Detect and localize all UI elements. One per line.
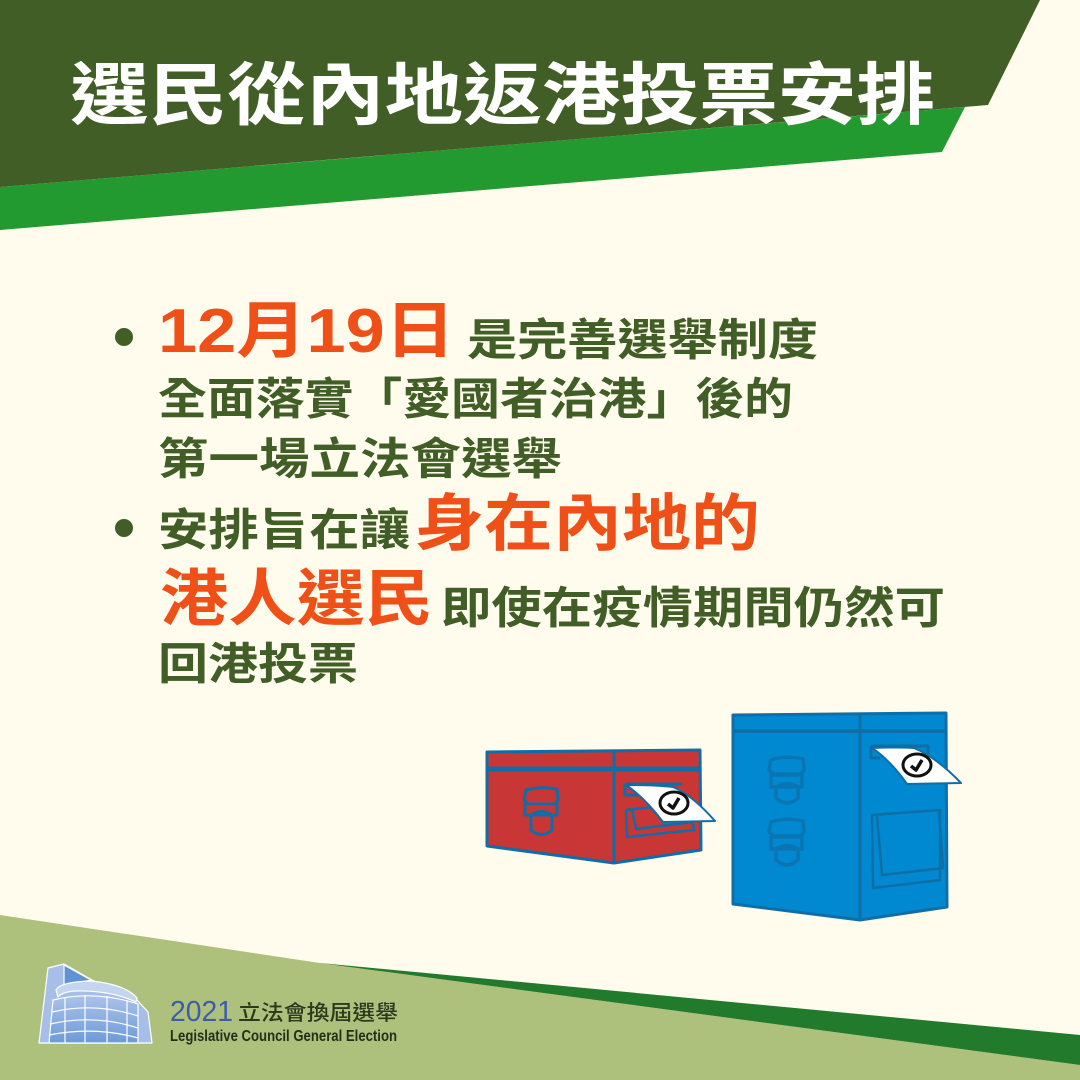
icon: red ballot box [487, 750, 715, 863]
top banner dark green [0, 0, 1040, 187]
english event name: Legislative Council General Election [170, 1028, 397, 1045]
line 4 text: 安排旨在讓 [158, 506, 410, 555]
red box handle [524, 788, 558, 834]
footer dark green wedge [320, 963, 1080, 1065]
line 6 text: 回港投票 [158, 640, 358, 689]
chinese event name: 立法會換屆選舉 [238, 1002, 398, 1025]
ballot paper [872, 748, 961, 784]
highlight: HK voters: 港人選民 [160, 565, 433, 634]
blue box slot [871, 746, 928, 758]
date highlight: 12月19日 [158, 297, 455, 366]
year: 2021 [170, 996, 233, 1028]
logo: legislative council building [39, 964, 152, 1043]
blue box handles [769, 757, 804, 803]
bullet list [115, 297, 945, 689]
footer light green band [0, 915, 1080, 1080]
icon: blue ballot box [733, 713, 961, 920]
blue box flap [872, 810, 943, 888]
line 3 text: 第一場立法會選舉 [158, 435, 562, 484]
line 5 text: 即使在疫情期間仍然可 [441, 584, 945, 633]
logo text [170, 996, 398, 1045]
red box slot [625, 784, 682, 795]
ballot paper [626, 785, 715, 822]
line 1 text: 是完善選舉制度 [467, 316, 818, 365]
red box flap [626, 806, 694, 837]
highlight: mainland: 身在內地的 [415, 490, 760, 559]
title: 選民從內地返港投票安排 [70, 58, 935, 134]
top banner light green stripe [0, 107, 965, 230]
bullet 1 dot [115, 328, 133, 346]
bullet 2 dot [115, 519, 133, 537]
line 2 text: 全面落實「愛國者治港」後的 [158, 375, 793, 424]
